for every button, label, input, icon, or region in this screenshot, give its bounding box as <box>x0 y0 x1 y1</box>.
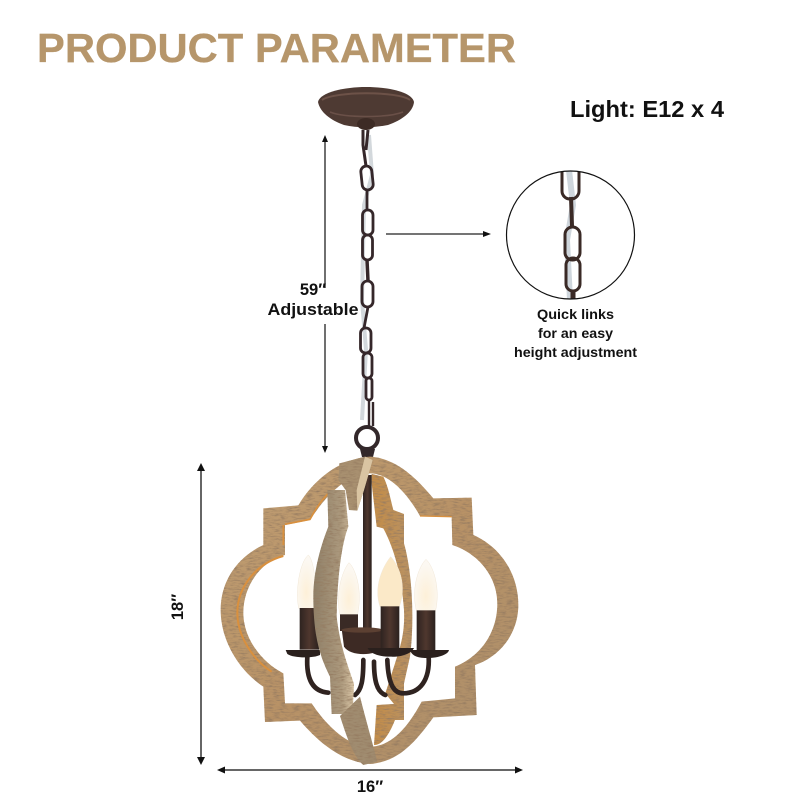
height arrow: fixture <box>197 463 205 765</box>
back band <box>372 474 412 745</box>
detail circle: chain close-up <box>506 160 634 300</box>
light bulb specification: Light: E12 x 4 <box>570 96 724 122</box>
callout caption: for an easy <box>538 325 613 341</box>
callout arrow <box>386 231 491 237</box>
width arrow <box>217 766 523 774</box>
chain length label <box>268 281 358 319</box>
height arrow: chain length <box>322 135 328 453</box>
hanging ring <box>356 427 378 457</box>
callout caption: Quick links <box>537 306 614 322</box>
chain length label: 59″ <box>300 281 326 299</box>
title: PRODUCT PARAMETER <box>37 25 516 71</box>
front wood band highlight <box>357 457 373 511</box>
candle cups and central body <box>300 606 435 654</box>
chain length label: Adjustable <box>268 301 358 319</box>
metal centre rod <box>363 475 372 628</box>
chandelier <box>221 457 518 765</box>
front wood band lower <box>340 697 377 765</box>
ceiling canopy <box>318 87 414 130</box>
callout caption: height adjustment <box>514 344 637 360</box>
front wood band middle <box>313 490 354 714</box>
candle arms <box>307 657 429 695</box>
callout caption <box>514 306 637 360</box>
drip pans <box>286 648 449 658</box>
fixture height label: 18″ <box>169 594 187 620</box>
cord behind chain <box>362 135 372 420</box>
front wood band upper <box>338 457 373 511</box>
outer quatrefoil frame <box>221 457 518 764</box>
width label: 16″ <box>357 778 383 796</box>
warm inner edge <box>237 556 283 672</box>
chain <box>360 130 374 427</box>
bulbs <box>297 555 437 615</box>
